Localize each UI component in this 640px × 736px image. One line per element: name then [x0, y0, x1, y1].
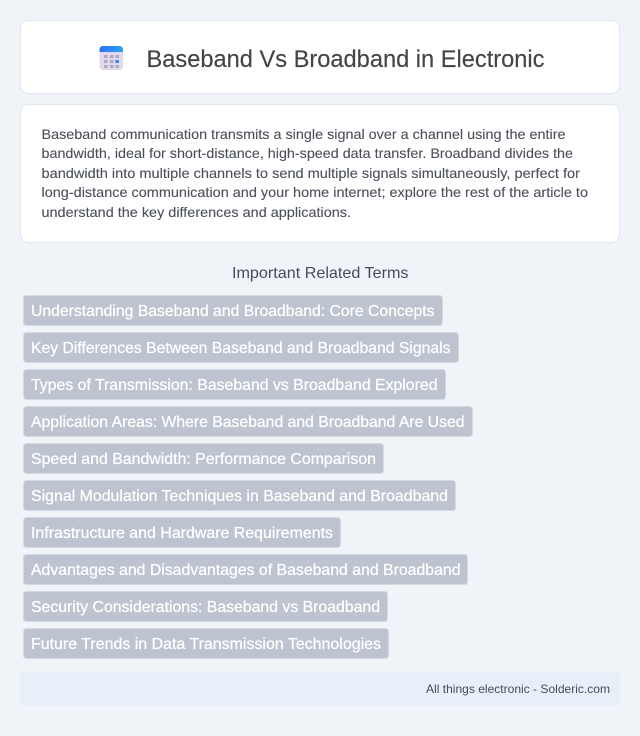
tag 10 [24, 628, 388, 658]
panel: summary [20, 104, 620, 242]
tag 8 [24, 554, 468, 584]
tag 6: Signal Modulation Techniques in Baseband and Broadband [31, 488, 448, 505]
tag 7 [24, 518, 340, 548]
footer text: All things electronic - Solderic.com [426, 682, 610, 696]
tag 5: Speed and Bandwidth: Performance Comparison [31, 451, 376, 468]
footer [20, 672, 620, 706]
summary text: understand the key differences and applications. [42, 204, 351, 220]
tag 9 [24, 592, 388, 622]
heading: important related terms: Important Related Terms [232, 265, 408, 282]
tag 10: Future Trends in Data Transmission Technologies [31, 636, 381, 653]
icon: calendar [100, 46, 123, 70]
tag 2 [24, 332, 458, 362]
tag 1: Understanding Baseband and Broadband: Core Concepts [31, 303, 434, 320]
summary text: Baseband communication transmits a single signal over a channel using the entire [42, 126, 566, 142]
tag 1 [24, 296, 442, 326]
summary text [42, 126, 588, 220]
summary text: bandwidth into multiple channels to send multiple signals simultaneously, perfect for [42, 165, 580, 181]
tag 4 [24, 406, 472, 436]
tag 9: Security Considerations: Baseband vs Broadband [31, 599, 380, 616]
tag 6 [24, 480, 456, 510]
tag 8: Advantages and Disadvantages of Baseband and Broadband [31, 562, 460, 579]
panel: header [20, 20, 620, 94]
tag 2: Key Differences Between Baseband and Broadband Signals [31, 340, 450, 357]
list: related term tags [24, 296, 472, 658]
tag 7: Infrastructure and Hardware Requirements [31, 525, 333, 542]
summary text: long-distance communication and your home internet; explore the rest of the article to [42, 184, 588, 200]
tag 3 [24, 370, 446, 400]
title: Baseband Vs Broadband in Electronic [146, 46, 544, 73]
summary text: bandwidth, ideal for short-distance, high-speed data transfer. Broadband divides the [42, 145, 573, 161]
tag 5 [24, 444, 384, 474]
tag 4: Application Areas: Where Baseband and Broadband Are Used [31, 414, 464, 431]
tag 3: Types of Transmission: Baseband vs Broadband Explored [31, 377, 438, 394]
